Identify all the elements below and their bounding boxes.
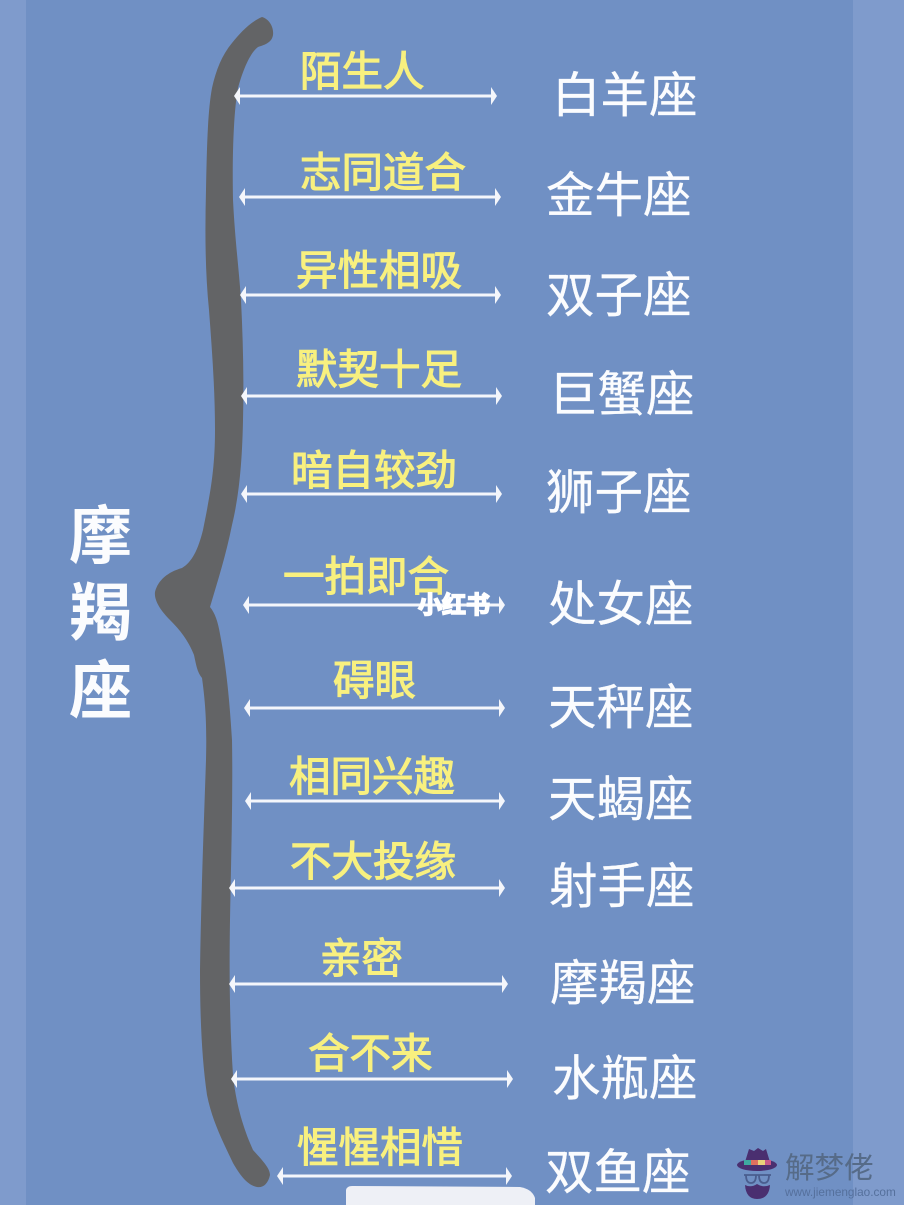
row 5: 暗自较劲 / 狮子座	[241, 447, 692, 520]
row 1: 陌生人 / 白羊座: 陌生人	[300, 48, 425, 95]
row 8: 相同兴趣 / 天蝎座: 相同兴趣	[289, 753, 455, 800]
row 2: 志同道合 / 金牛座: 金牛座	[546, 169, 692, 223]
main title: 摩羯座	[69, 502, 132, 727]
icon: hatted bearded man logo	[737, 1148, 777, 1199]
row 1: 陌生人 / 白羊座	[234, 48, 698, 123]
row 4: 默契十足 / 巨蟹座: 巨蟹座	[549, 368, 695, 422]
row 6: 一拍即合 / 处女座: 一拍即合	[283, 553, 449, 600]
row 9: 不大投缘 / 射手座: 不大投缘	[290, 838, 456, 885]
row 6: 一拍即合 / 处女座: 处女座	[548, 578, 694, 632]
row 11: 合不来 / 水瓶座	[231, 1030, 698, 1106]
row 4: 默契十足 / 巨蟹座	[241, 346, 695, 422]
row 11: 合不来 / 水瓶座: 合不来	[308, 1030, 433, 1077]
row 6: 一拍即合 / 处女座	[243, 553, 694, 632]
row 9: 不大投缘 / 射手座	[229, 838, 695, 914]
curly brace	[155, 17, 273, 1187]
row 8: 相同兴趣 / 天蝎座	[245, 753, 694, 827]
main title: 摩羯座: 羯	[69, 579, 132, 649]
logo text: 解梦佬: 解梦佬	[785, 1152, 874, 1185]
row 11: 合不来 / 水瓶座: 水瓶座	[552, 1052, 698, 1106]
row 10: 亲密 / 摩羯座	[229, 935, 696, 1011]
row 1: 陌生人 / 白羊座: 白羊座	[552, 69, 698, 123]
watermark: 小红书: 小红书	[418, 592, 490, 619]
row 5: 暗自较劲 / 狮子座: 狮子座	[546, 466, 692, 520]
row 2: 志同道合 / 金牛座: 志同道合	[300, 149, 466, 196]
row 3: 异性相吸 / 双子座: 异性相吸	[296, 247, 462, 294]
logo url: www.jiemenglao.com	[784, 1185, 896, 1199]
row 7: 碍眼 / 天秤座: 碍眼	[333, 657, 416, 704]
row 12: 惺惺相惜 / 双鱼座: 惺惺相惜	[297, 1124, 463, 1171]
main title: 摩羯座: 座	[69, 657, 132, 727]
row 9: 不大投缘 / 射手座: 射手座	[549, 860, 695, 914]
row 7: 碍眼 / 天秤座	[244, 657, 694, 735]
row 3: 异性相吸 / 双子座: 双子座	[546, 269, 692, 323]
row 10: 亲密 / 摩羯座: 摩羯座	[550, 957, 696, 1011]
row 12: 惺惺相惜 / 双鱼座	[277, 1124, 691, 1200]
row 5: 暗自较劲 / 狮子座: 暗自较劲	[291, 447, 457, 494]
row 12: 惺惺相惜 / 双鱼座: 双鱼座	[545, 1146, 691, 1200]
white bar at bottom edge	[346, 1186, 535, 1205]
row 2: 志同道合 / 金牛座	[239, 149, 692, 223]
main title: 摩羯座: 摩	[69, 502, 132, 572]
row 8: 相同兴趣 / 天蝎座: 天蝎座	[548, 773, 694, 827]
row 3: 异性相吸 / 双子座	[240, 247, 692, 323]
row 7: 碍眼 / 天秤座: 天秤座	[548, 681, 694, 735]
row 10: 亲密 / 摩羯座: 亲密	[320, 935, 403, 982]
row 4: 默契十足 / 巨蟹座: 默契十足	[296, 346, 462, 393]
